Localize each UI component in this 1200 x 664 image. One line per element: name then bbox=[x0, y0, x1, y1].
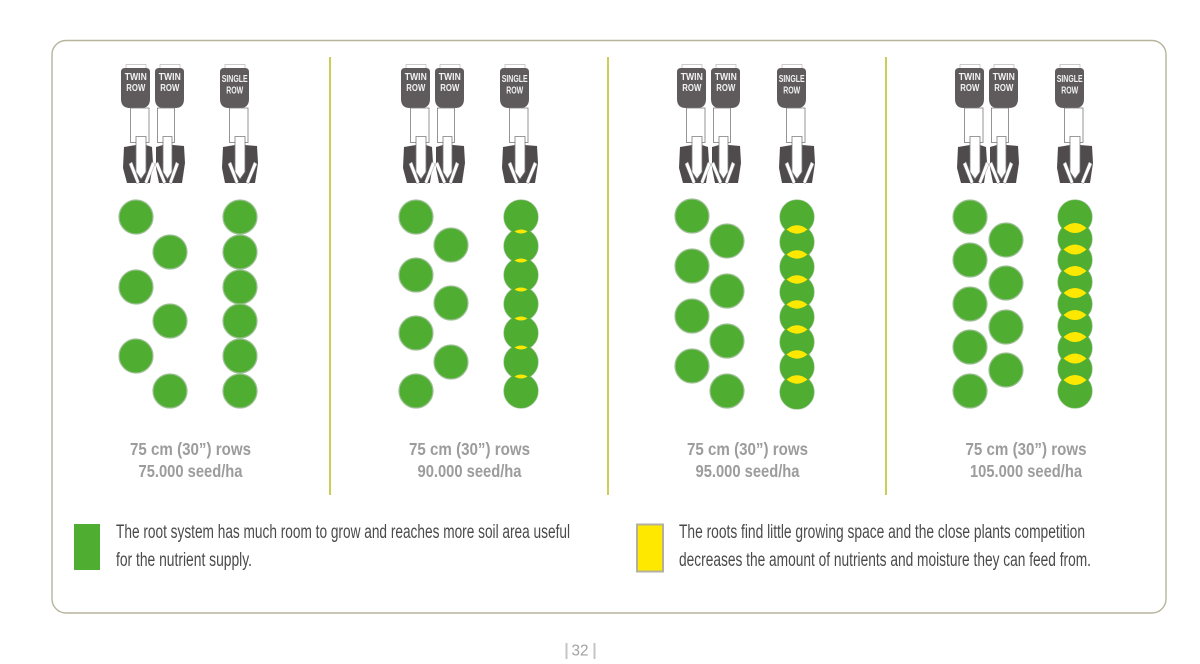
single row plant circles with overlap bbox=[780, 200, 814, 409]
icon: single row planter unit: SINGLE bbox=[779, 74, 805, 85]
icon: twin row planter units bbox=[677, 64, 741, 184]
icon: single row planter unit: ROW bbox=[506, 86, 524, 96]
icon: twin row planter units: ROW bbox=[406, 82, 425, 94]
icon: twin row planter units: ROW bbox=[440, 82, 459, 94]
label: row spacing and density: 75 cm (30”) rows bbox=[687, 439, 808, 459]
legend: yellow description bbox=[679, 522, 1091, 571]
twin row plant circles bbox=[953, 200, 1023, 408]
label: row spacing and density: 95.000 seed/ha bbox=[696, 461, 800, 481]
icon: single row planter unit bbox=[777, 64, 815, 184]
label: row spacing and density: 75 cm (30”) rows bbox=[966, 439, 1087, 459]
icon: twin row planter units: ROW bbox=[960, 82, 979, 94]
single row plant circles with overlap bbox=[504, 200, 538, 408]
twin row plant circles bbox=[399, 200, 468, 408]
icon: twin row planter units: ROW bbox=[994, 82, 1013, 94]
icon: twin row planter units: TWIN bbox=[715, 71, 737, 83]
icon: twin row planter units: TWIN bbox=[439, 71, 461, 83]
icon: twin row planter units: TWIN bbox=[681, 71, 703, 83]
icon: twin row planter units: ROW bbox=[682, 82, 701, 94]
icon: twin row planter units: TWIN bbox=[993, 71, 1015, 83]
icon: twin row planter units bbox=[955, 64, 1019, 184]
label: row spacing and density: 75.000 seed/ha bbox=[138, 461, 243, 481]
icon: single row planter unit: SINGLE bbox=[1057, 74, 1083, 85]
column 2: 90.000 seed/ha bbox=[399, 64, 538, 481]
label: row spacing and density bbox=[409, 439, 530, 481]
label: row spacing and density: 75 cm (30”) rows bbox=[409, 439, 530, 459]
icon: twin row planter units: ROW bbox=[126, 82, 145, 94]
icon: twin row planter units: TWIN bbox=[125, 71, 147, 83]
icon: twin row planter units: ROW bbox=[716, 82, 735, 94]
icon: twin row planter units: TWIN bbox=[405, 71, 427, 83]
label: row spacing and density bbox=[687, 439, 808, 481]
column 4: 105.000 seed/ha bbox=[953, 64, 1093, 481]
icon: single row planter unit: SINGLE bbox=[222, 74, 248, 85]
legend: green description: for the nutrient supply. bbox=[116, 550, 252, 571]
icon: single row planter unit: ROW bbox=[783, 86, 801, 96]
legend: green swatch bbox=[74, 524, 100, 570]
twin row plant circles bbox=[675, 199, 744, 408]
icon: twin row planter units: TWIN bbox=[159, 71, 181, 83]
page number bbox=[566, 642, 596, 660]
legend: green description: The root system has much room to grow and reaches more soil area useful bbox=[116, 522, 570, 543]
icon: single row planter unit: SINGLE bbox=[502, 74, 528, 85]
single row plant circles bbox=[223, 200, 257, 408]
legend: green description bbox=[116, 522, 570, 571]
single row plant circles with overlap bbox=[1058, 200, 1092, 408]
icon: single row planter unit: ROW bbox=[1061, 86, 1079, 96]
icon: twin row planter units bbox=[121, 64, 185, 184]
page number: 32 bbox=[572, 642, 589, 660]
icon: single row planter unit bbox=[220, 64, 258, 184]
label: row spacing and density: 105.000 seed/ha bbox=[970, 461, 1082, 481]
column 1: 75.000 seed/ha bbox=[119, 64, 258, 481]
label: row spacing and density: 90.000 seed/ha bbox=[418, 461, 522, 481]
label: row spacing and density: 75 cm (30”) rows bbox=[130, 439, 251, 459]
icon: twin row planter units bbox=[401, 64, 465, 184]
label: row spacing and density bbox=[966, 439, 1087, 481]
icon: single row planter unit bbox=[500, 64, 538, 184]
column 3: 95.000 seed/ha bbox=[675, 64, 815, 481]
label: row spacing and density bbox=[130, 439, 251, 481]
icon: single row planter unit: ROW bbox=[226, 86, 244, 96]
twin row plant circles bbox=[119, 200, 187, 408]
legend: yellow swatch bbox=[637, 524, 663, 572]
icon: twin row planter units: ROW bbox=[160, 82, 179, 94]
icon: single row planter unit bbox=[1055, 64, 1093, 184]
icon: twin row planter units: TWIN bbox=[959, 71, 981, 83]
